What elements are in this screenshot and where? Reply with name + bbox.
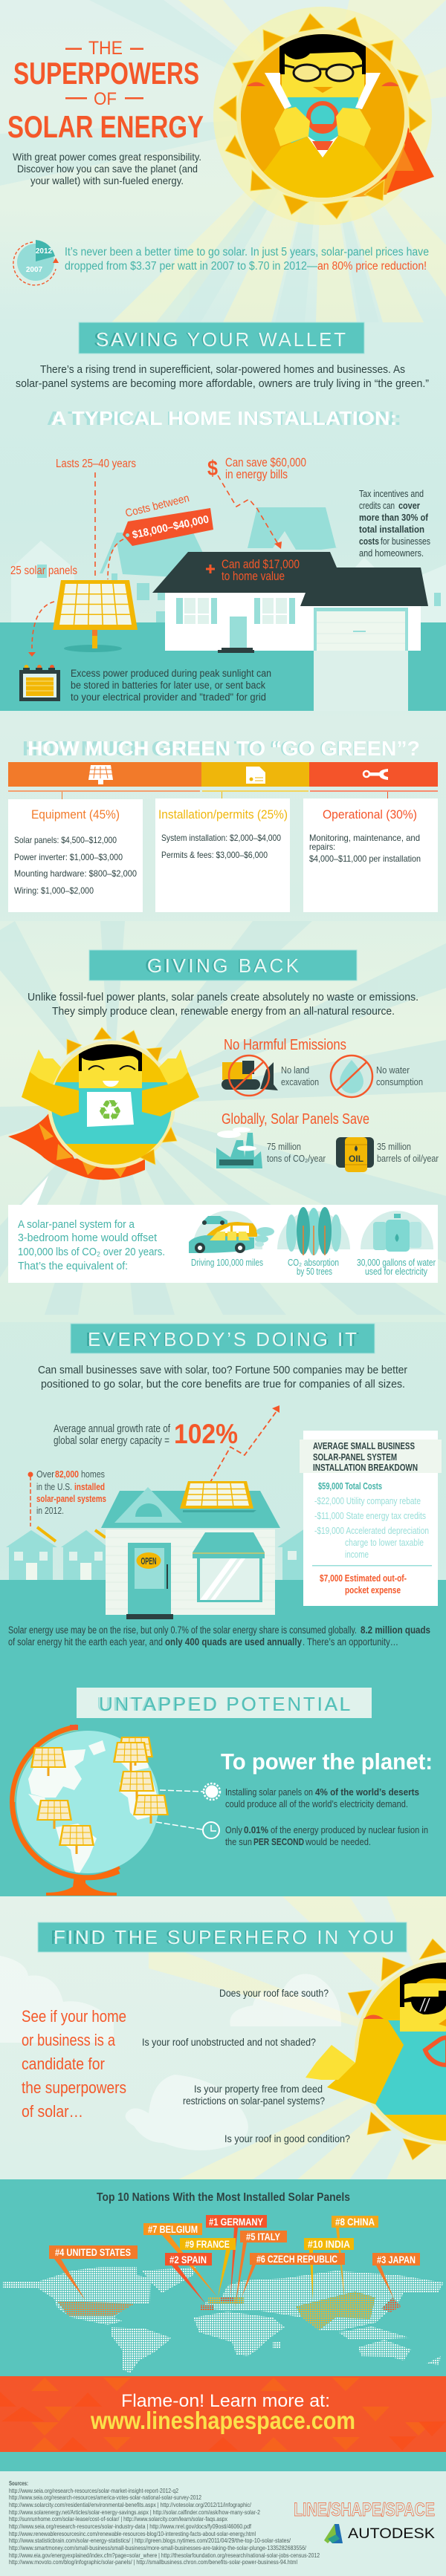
label: gallons of water: used for electricity	[365, 1266, 428, 1277]
icon: factory	[216, 1128, 262, 1168]
sources list: http://www.seia.org/research-resources/america-votes-solar-national-solar-survey-2012	[9, 2494, 201, 2501]
fact: fusion: Only	[225, 1824, 242, 1835]
candidate statement: the superpowers	[22, 2078, 126, 2097]
callout: tax incentives: and homeowners.	[359, 548, 424, 559]
checklist questions: Is your roof unobstructed and not shaded?	[142, 2037, 316, 2048]
map label pointers	[54, 2228, 394, 2309]
stat: growth rate 102%: global solar energy capacity =	[54, 1434, 169, 1447]
label: oil saved	[377, 1142, 439, 1164]
callout: 82,000 homes	[28, 1468, 106, 1526]
icon: price drop pie 2007 to 2012: 2007	[26, 266, 43, 274]
section banner: everybody's doing it: EVERYBODY’S DOING IT	[85, 1328, 359, 1350]
background rays: giving back sun	[0, 921, 446, 1322]
callout: price tag costs between: Costs between	[124, 492, 190, 520]
equivalents intro text: 100,000 lbs of CO₂ over 20 years.	[18, 1246, 165, 1258]
cost share bar	[8, 762, 438, 787]
heading: how much green to go green: HOW MUCH GREEN TO “GO GREEN”?	[22, 737, 420, 760]
panel: equipment: Power inverter: $1,000–$3,000	[14, 852, 123, 862]
house details and rooftop panels	[14, 1527, 297, 1580]
title: THE	[88, 38, 123, 59]
sources list: http://www.smartmoney.com/small-business/small-business/more-small-businesses-are-taking-the-solar-plunge-1335282683556/	[9, 2544, 307, 2551]
callout: tax incentives: costs	[359, 536, 379, 547]
everybody paragraph: Can small businesses save with solar, too? Fortune 500 companies may be better	[38, 1364, 407, 1376]
panel: operational: repairs:	[309, 842, 335, 852]
title	[7, 38, 204, 144]
call to action band	[0, 2376, 446, 2452]
label: no water consumption	[376, 1065, 423, 1087]
callout: 82,000 homes: installed	[74, 1481, 105, 1492]
label: tree absorption: CO₂ absorption	[288, 1258, 339, 1268]
checklist questions	[142, 1988, 350, 2144]
panel: small business breakdown: $59,000 Total Costs	[318, 1480, 382, 1492]
callout: tax incentives: Tax incentives and	[359, 489, 424, 499]
background houses	[6, 1529, 305, 1580]
fact: fusion: the sun	[225, 1836, 252, 1847]
map label: #9 France: #9 FRANCE	[185, 2239, 230, 2250]
icon: battery	[19, 665, 60, 701]
callout: 82,000 homes: 82,000	[55, 1468, 79, 1480]
icon: sunglasses superhero sun	[306, 1939, 446, 2160]
icon: crossed out water drop	[331, 1056, 372, 1097]
candidate statement: or business is a	[22, 2031, 116, 2049]
sources list: http://www.solarcity.com/residential/environmental-benefits.aspx | http://votesolar.org/2012/11/infographic/	[9, 2501, 252, 2508]
icon: water jugs	[361, 1211, 433, 1252]
map label: #10 India: #10 INDIA	[308, 2239, 350, 2250]
label: no land excavation: No land	[281, 1065, 309, 1076]
label: no water consumption: consumption	[376, 1077, 423, 1087]
heading: no harmful emissions: No Harmful Emissions	[224, 1037, 346, 1053]
sources list: http://www.solarenergy.net/Articles/solar-energy-savings.aspx | http://solar.calfinder.com/ask/how-many-solar-2	[9, 2508, 260, 2516]
giving back paragraph	[28, 991, 418, 1018]
giving back paragraph: They simply produce clean, renewable energy from an all-natural resource.	[52, 1005, 395, 1018]
panel: installation and permits: Permits & fees: $3,000–$6,000	[161, 850, 268, 860]
callout: tax incentives: total installation	[359, 524, 424, 535]
panel: installation and permits	[155, 799, 290, 912]
fact: fusion	[156, 1822, 428, 1847]
sources list	[9, 2479, 320, 2566]
logo: autodesk: AUTODESK	[348, 2525, 435, 2542]
quads paragraph: . There’s an opportunity…	[303, 1636, 398, 1648]
panel: operational: Operational (30%)	[323, 807, 417, 822]
background rays: hero sun	[0, 0, 446, 322]
heading: top 10 nations: Top 10 Nations With the Most Installed Solar Panels	[97, 2191, 350, 2204]
panel: small business breakdown: income	[345, 1549, 369, 1560]
intro paragraph	[13, 151, 201, 186]
icon: flexing sun with recycling badge	[8, 1027, 199, 1180]
map label: #1 Germany: #1 GERMANY	[209, 2216, 263, 2228]
fact: fusion: 0.01%	[244, 1824, 268, 1835]
callout: 82,000 homes: homes	[81, 1468, 105, 1480]
checklist questions: Is your roof in good condition?	[224, 2133, 350, 2144]
panel: operational: Monitoring, maintenance, and	[309, 833, 420, 843]
intro paragraph: Discover how you can save the planet (and	[17, 163, 198, 175]
panel: small business breakdown	[300, 1431, 442, 1606]
battery text: be stored in batteries for later use, or sent back	[71, 680, 265, 691]
panel: small business breakdown: $7,000 Estimated out-of-	[320, 1572, 407, 1584]
battery text: to your electrical provider and "traded" for grid	[71, 692, 266, 703]
sources list: http://www.seia.org/research-resources/solar-industry-data | http://www.nrel.gov/docs/fy09osti/46060.pdf	[9, 2523, 252, 2530]
checklist questions: Does your roof face south?	[219, 1988, 329, 1999]
map label: #8 China: #8 CHINA	[335, 2216, 375, 2228]
ground band	[0, 1580, 446, 1896]
panel: small business breakdown: SOLAR-PANEL SYSTEM	[313, 1451, 397, 1463]
battery text: Excess power produced during peak sunlight can	[71, 668, 271, 679]
panel: small business breakdown: charge to lower taxable	[345, 1537, 424, 1548]
panel: equipment: Wiring: $1,000–$2,000	[14, 885, 94, 896]
map label: #3 Japan: #3 JAPAN	[377, 2254, 416, 2266]
dotted world map	[3, 2267, 444, 2373]
fact: fusion: PER SECOND	[253, 1836, 304, 1847]
intro paragraph: your wallet) with sun-fueled energy.	[30, 175, 184, 186]
map label: #7 Belgium: #7 BELGIUM	[148, 2224, 198, 2235]
callout: add to home value: Can add $17,000	[222, 558, 300, 571]
home installation illustration	[0, 507, 446, 711]
label: driving miles: Driving 100,000 miles	[191, 1258, 263, 1268]
background rays: superhero sun	[149, 1896, 446, 2179]
stat: growth rate 102%	[54, 1419, 238, 1449]
panel: equipment: Solar panels: $4,500–$12,000	[14, 835, 117, 845]
connectors to cost cards	[8, 790, 438, 799]
heading: a typical home installation: A TYPICAL HOME INSTALLATION:	[47, 407, 401, 429]
panel: equipment: Equipment (45%)	[31, 807, 120, 822]
everybody paragraph	[38, 1364, 407, 1391]
callout: add to home value	[206, 558, 300, 583]
small business shop illustration: OPEN	[141, 1555, 156, 1567]
panel: equipment: Mounting hardware: $800–$2,000	[14, 868, 137, 879]
label: CO2 saved: 75 million	[267, 1142, 301, 1152]
icon: crossed out bulldozer	[222, 1056, 278, 1096]
sources list: Sources:	[9, 2479, 28, 2487]
quads paragraph: 8.2 million quads	[361, 1624, 430, 1636]
callout: can save $60,000: $	[207, 457, 218, 481]
fact: deserts: could produce all of the world’s electricity demand.	[225, 1798, 408, 1809]
label: oil saved: barrels of oil/year	[377, 1154, 439, 1164]
call to action band: www.lineshapespace.com	[90, 2407, 355, 2434]
checklist questions: restrictions on solar-panel systems?	[183, 2095, 325, 2107]
callout: 82,000 homes: solar-panel systems	[36, 1493, 106, 1504]
section banner: giving back: GIVING BACK	[147, 954, 300, 977]
callout: can save $60,000: Can save $60,000	[225, 456, 306, 469]
callout: tax incentives: credits can	[359, 501, 395, 511]
quads paragraph	[8, 1624, 430, 1648]
equivalents intro text: 3-bedroom home would offset	[18, 1232, 158, 1244]
section banner: untapped potential: UNTAPPED POTENTIAL	[97, 1693, 351, 1715]
callout: tax incentives	[359, 489, 430, 559]
label: oil saved: 35 million	[377, 1142, 411, 1152]
section banner: find the superhero in you	[38, 1922, 407, 1952]
heading: how much green to go green: HOW MUCH GREEN TO “GO GREEN”?	[28, 737, 420, 760]
section banner: find the superhero in you: FIND THE SUPERHERO IN YOU	[51, 1926, 394, 1948]
label: no land excavation	[281, 1065, 319, 1087]
logo: autodesk	[324, 2524, 435, 2543]
label: 25 solar panels: 25 solar panels	[10, 565, 77, 577]
price reduction statement: an 80% price reduction!	[317, 260, 427, 273]
saving paragraph: solar-panel systems are becoming more affordable, owners are truly living in “the green.”	[16, 377, 429, 390]
icon: price drop pie 2007 to 2012	[13, 240, 59, 285]
callout: 82,000 homes: Over	[36, 1468, 55, 1480]
intro paragraph: With great power comes great responsibility.	[13, 151, 201, 163]
price reduction statement: dropped from $3.37 per watt in 2007 to $.70 in 2012—	[65, 260, 317, 273]
fact: fusion: would be needed.	[305, 1836, 371, 1847]
label: no land excavation: excavation	[281, 1077, 319, 1087]
quads paragraph: of solar energy hit the earth each year, and	[8, 1636, 163, 1648]
map label: #4 United States: #4 UNITED STATES	[55, 2247, 131, 2258]
label: CO2 saved: tons of CO₂/year	[267, 1154, 326, 1164]
panel: small business breakdown: INSTALLATION BREAKDOWN	[313, 1462, 418, 1473]
background clouds	[0, 1956, 341, 2150]
sources list: http://www.movoto.com/blog/infographic/solar-panels/ | http://smallbusiness.chron.com/benefits-solar-power-business-94.html	[9, 2558, 297, 2566]
label: gallons of water	[357, 1258, 436, 1277]
section banner: untapped potential: UNTAPPED POTENTIAL	[99, 1693, 350, 1715]
callout: can save $60,000: in energy bills	[225, 468, 288, 481]
candidate statement	[22, 2007, 126, 2121]
icon: globe with solar panels	[13, 1725, 169, 1896]
callout: 82,000 homes: in 2012.	[36, 1505, 64, 1516]
section banner: saving your wallet: SAVING YOUR WALLET	[94, 328, 346, 351]
callout: tax incentives: cover	[398, 501, 420, 511]
label: tree absorption	[288, 1258, 339, 1277]
panel: small business breakdown: pocket expense	[345, 1584, 401, 1596]
battery text	[71, 668, 271, 703]
sources list: http://www.eia.gov/energyexplained/index.cfm?page=solar_where | http://thesolarfoundation.org/research/national-solar-jobs-census-2012	[9, 2551, 320, 2559]
icon: cars	[189, 1211, 274, 1253]
giving back paragraph: Unlike fossil-fuel power plants, solar panels create absolutely no waste or emissions.	[28, 991, 418, 1004]
equivalents intro text: That’s the equivalent of:	[18, 1260, 128, 1272]
panel: installation and permits: Installation/permits (25%)	[158, 807, 288, 822]
callout: tax incentives: more than 30% of	[359, 513, 429, 523]
icon: trees	[277, 1207, 350, 1255]
checklist questions: Is your property free from deed	[194, 2084, 323, 2095]
panel: operational: $4,000–$11,000 per installation	[309, 853, 421, 864]
panel: operational	[303, 799, 438, 912]
panel: equipment	[8, 799, 143, 912]
section banner: saving your wallet	[79, 322, 364, 354]
call to action band: Flame-on! Learn more at:	[121, 2391, 330, 2411]
map label: #2 Spain: #2 SPAIN	[169, 2254, 207, 2266]
arrow: rising growth line	[210, 1405, 279, 1483]
callout: price tag costs between	[108, 492, 213, 579]
fact: deserts	[160, 1783, 419, 1809]
equivalents intro text	[18, 1218, 165, 1272]
solar panel on stand	[53, 580, 138, 652]
callout: add to home value: to home value	[222, 570, 285, 583]
section banner: find the superhero in you: FIND THE SUPERHERO IN YOU	[54, 1926, 394, 1948]
saving paragraph	[16, 363, 429, 390]
sources list: http://www.seia.org/research-resources/solar-market-insight-report-2012-q2	[9, 2487, 178, 2494]
icon: oil barrels	[336, 1137, 374, 1172]
sources list: http://www.renewableresourcesinc.com/renewable-resources-blog/10-interesting-facts-about-solar-energy.html	[9, 2530, 256, 2537]
icon: price drop pie 2007 to 2012: 2012	[36, 247, 53, 256]
fact: deserts: Installing solar panels on	[225, 1786, 313, 1798]
callout: lasts 25-40 years: Lasts 25–40 years	[56, 458, 136, 470]
icon: superhero sun with cape	[213, 7, 434, 225]
quads paragraph: only 400 quads are used annually	[165, 1636, 302, 1648]
heading: globally solar panels save: Globally, Solar Panels Save	[222, 1111, 369, 1128]
label: no water consumption: No water	[376, 1065, 410, 1076]
section banner: giving back: GIVING BACK	[145, 954, 299, 977]
label: CO2 saved	[267, 1142, 326, 1164]
everybody paragraph: positioned to go solar, but the core benefits are true for companies of all sizes.	[41, 1378, 405, 1391]
section banner: untapped potential	[77, 1688, 372, 1718]
sources list: http://sunrunhome.com/solar-lease/cost-of-solar/ | http://www.solarcity.com/learn/solar-faqs.aspx	[9, 2515, 228, 2523]
stat: growth rate 102%: Average annual growth rate of	[54, 1422, 171, 1435]
arrow: panel to battery	[28, 602, 54, 657]
sources list: http://www.statisticbrain.com/solar-energy-statistics/ | http://green.blogs.nytimes.com/2011/04/29/the-top-10-solar-states/	[9, 2537, 291, 2544]
title: OF	[94, 89, 117, 109]
map label: #5 Italy: #5 ITALY	[246, 2231, 280, 2242]
equivalents intro text: A solar-panel system for a	[18, 1218, 135, 1231]
section banner: saving your wallet: SAVING YOUR WALLET	[96, 328, 346, 351]
map label: #6 Czech Republic: #6 CZECH REPUBLIC	[256, 2254, 337, 2265]
section banner: everybody's doing it	[71, 1324, 375, 1353]
label: tree absorption: by 50 trees	[297, 1266, 332, 1277]
panel: installation and permits: System installation: $2,000–$4,000	[161, 833, 281, 843]
small business shop illustration	[101, 1481, 280, 1619]
callout: price tag costs between: $18,000–$40,000	[132, 513, 210, 541]
fact: deserts: 4% of the world’s deserts	[315, 1786, 419, 1798]
stat: growth rate 102%: 102%	[174, 1419, 238, 1449]
heading: to power the planet: To power the planet:	[221, 1749, 433, 1775]
candidate statement: of solar…	[22, 2102, 83, 2121]
heading: a typical home installation: A TYPICAL HOME INSTALLATION:	[51, 407, 397, 429]
section banner: everybody's doing it: EVERYBODY’S DOING IT	[88, 1328, 357, 1350]
price reduction statement	[65, 246, 429, 273]
panel: equivalents	[8, 1176, 438, 1283]
teal map and footer band	[0, 2179, 446, 2471]
quads paragraph: Solar energy use may be on the rise, but only 0.7% of the solar energy share is consumed globally.	[8, 1624, 357, 1636]
title: SOLAR ENERGY	[7, 109, 204, 144]
panel: small business breakdown: AVERAGE SMALL BUSINESS	[313, 1440, 415, 1451]
candidate statement: See if your home	[22, 2007, 126, 2026]
candidate statement: candidate for	[22, 2055, 105, 2073]
section banner: giving back	[89, 950, 357, 980]
title: SUPERPOWERS	[13, 56, 199, 91]
saving paragraph: There’s a rising trend in superefficient, solar-powered homes and businesses. As	[40, 363, 405, 376]
callout: can save $60,000	[207, 456, 306, 549]
icon: oil barrels: OIL	[349, 1154, 363, 1164]
callout: tax incentives: for businesses	[381, 536, 430, 547]
icon: flexing sun with recycling badge: ♻	[97, 1094, 123, 1127]
callout: 82,000 homes: in the U.S.	[36, 1481, 72, 1492]
